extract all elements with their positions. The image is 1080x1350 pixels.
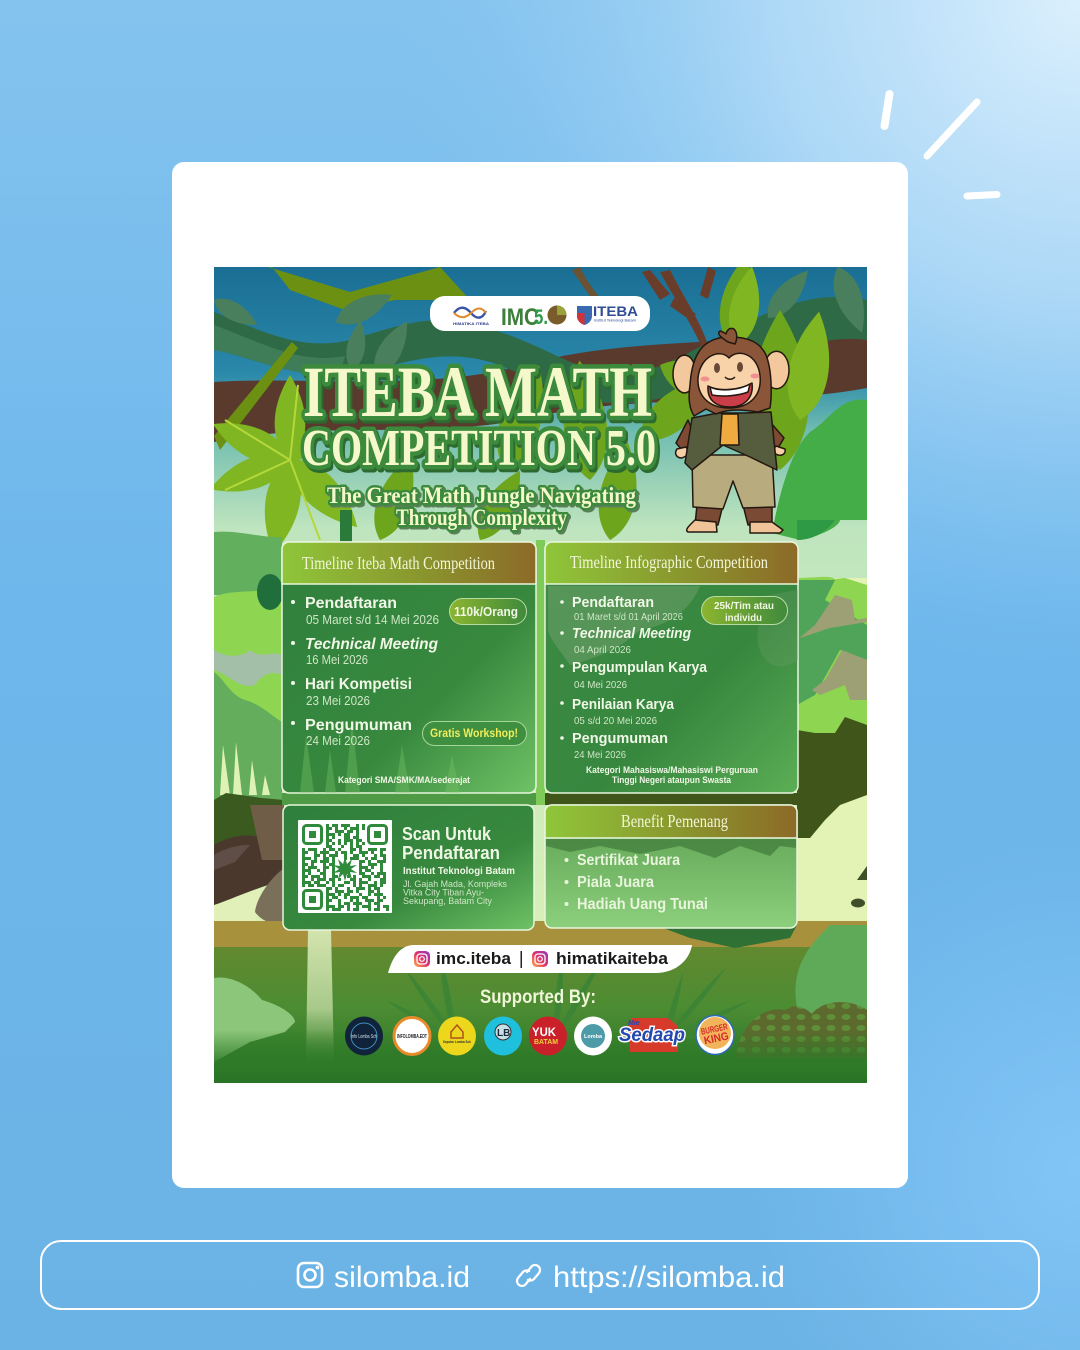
supported by heading: Supported By: xyxy=(480,987,596,1008)
logo: round: Lomba xyxy=(584,1034,602,1040)
logo: IMC 5.0: 5. xyxy=(534,306,548,329)
list: schedule: 16 Mei 2026 xyxy=(306,652,368,667)
white card xyxy=(172,162,908,1188)
subtitle: The Great Math Jungle Navigating xyxy=(327,483,636,508)
footer bar: https://silomba.id xyxy=(553,1261,785,1294)
monkey arms xyxy=(675,419,785,448)
monkey feet xyxy=(687,520,783,533)
logo: Infolomba xyxy=(394,1018,430,1054)
logo: yellow: Seputar Lomba Sch xyxy=(443,1039,471,1044)
footer bar xyxy=(41,1241,1039,1309)
logo: ITEBA: Institut Teknologi Batam xyxy=(594,318,636,322)
social handles pill: himatikaiteba xyxy=(556,949,669,968)
list: schedule: Penilaian Karya xyxy=(572,696,675,713)
logo: round xyxy=(574,1016,612,1056)
gutter foliage xyxy=(282,793,540,805)
title: ITEBA MATH xyxy=(303,352,652,432)
price pill: 25k/Tim atau xyxy=(714,600,774,612)
panel: scan to register xyxy=(283,805,534,930)
logo: Yuk Batam xyxy=(529,1016,567,1056)
logo pill xyxy=(430,296,650,331)
heading: Timeline Infographic Competition xyxy=(570,552,768,572)
logo: Yuk Batam: YUK xyxy=(532,1025,556,1039)
decorative sparkle strokes xyxy=(884,94,997,196)
monkey boots xyxy=(695,505,772,525)
title xyxy=(300,364,660,473)
social handles pill xyxy=(388,945,692,973)
list: schedule: Technical Meeting xyxy=(305,636,438,653)
footer bar: silomba.id xyxy=(334,1261,470,1294)
category note: Tinggi Negeri ataupun Swasta xyxy=(612,775,732,786)
list: schedule: Pengumpulan Karya xyxy=(572,659,708,676)
palm fronds xyxy=(386,968,750,1022)
poster xyxy=(205,254,874,1083)
logo: Mie Sedaap xyxy=(619,1018,685,1052)
subtitle: Through Complexity xyxy=(396,505,567,530)
scan text: Institut Teknologi Batam xyxy=(403,865,515,877)
jungle background scene xyxy=(205,254,874,1083)
category note: Kategori SMA/SMK/MA/sederajat xyxy=(338,775,471,786)
palm fruit clusters xyxy=(735,1002,867,1058)
logo: LB: LB xyxy=(497,1028,510,1039)
logo: himatika: HIMATIKA ITEBA xyxy=(453,321,489,326)
monkey hands xyxy=(676,446,785,458)
list: prizes: Hadiah Uang Tunai xyxy=(577,896,708,913)
right bush xyxy=(772,400,867,540)
scan text: Vitka City Tiban Ayu- xyxy=(403,888,484,898)
icon: instagram xyxy=(414,951,430,967)
monkey ears xyxy=(673,351,789,393)
list: schedule xyxy=(560,594,708,761)
icon: instagram outline xyxy=(298,1263,322,1287)
monkey vest xyxy=(685,412,777,470)
list: schedule: 05 Maret s/d 14 Mei 2026 xyxy=(306,612,439,627)
logo: ITEBA xyxy=(577,306,638,325)
panel: winner benefits xyxy=(545,805,797,928)
scan text xyxy=(402,824,515,907)
logo: ITEBA: ITEBA xyxy=(593,304,638,319)
icon: instagram xyxy=(532,951,548,967)
price pill xyxy=(450,598,526,624)
list: schedule: Pengumuman xyxy=(572,730,668,747)
mascot: monkey xyxy=(673,328,789,533)
icon: link xyxy=(517,1265,540,1286)
logo: IMC 5.0: IMC xyxy=(501,304,539,331)
price pill: 110k/Orang xyxy=(454,604,518,619)
QR code xyxy=(298,820,392,913)
logo: IMC 5.0 xyxy=(502,306,566,325)
list: schedule: 01 Maret s/d 01 April 2026 xyxy=(574,611,683,623)
panel: timeline math xyxy=(282,542,536,793)
logo: himatika xyxy=(453,308,489,326)
category note xyxy=(586,765,758,786)
panel: timeline infographic xyxy=(545,542,798,793)
scan text: Pendaftaran xyxy=(402,843,500,863)
price pill xyxy=(702,596,788,624)
heading: Benefit Pemenang xyxy=(621,811,728,831)
list: schedule: 04 Mei 2026 xyxy=(574,679,627,691)
workshop pill xyxy=(422,722,526,746)
list: schedule: 05 s/d 20 Mei 2026 xyxy=(574,715,657,727)
list: schedule: 23 Mei 2026 xyxy=(306,693,370,708)
monkey mouth xyxy=(708,383,752,407)
logo: Yuk Batam: BATAM xyxy=(534,1039,558,1046)
monkey eyes xyxy=(714,362,743,373)
logo: LB xyxy=(484,1016,522,1056)
monkey cheeks xyxy=(700,374,760,382)
list: schedule xyxy=(291,595,439,748)
logo: Infolomba: INFOLOMBA.EDT xyxy=(397,1034,427,1040)
list: schedule: 24 Mei 2026 xyxy=(306,733,370,748)
logo: yellow xyxy=(438,1016,476,1056)
monkey head xyxy=(689,337,771,416)
category note: Kategori Mahasiswa/Mahasiswi Perguruan xyxy=(586,765,758,776)
list: prizes: Piala Juara xyxy=(577,874,654,891)
social handles pill: imc.iteba xyxy=(436,949,512,968)
logo: Burger King xyxy=(696,1016,734,1054)
scan text: Jl. Gajah Mada, Kompleks xyxy=(403,879,507,890)
heading: Timeline Iteba Math Competition xyxy=(302,553,495,573)
scan text: Sekupang, Batam City xyxy=(403,896,492,907)
scan text: Scan Untuk xyxy=(402,824,492,844)
list: schedule: Pendaftaran xyxy=(572,594,654,611)
logo: Burger King: BURGER xyxy=(700,1021,729,1037)
monkey nose xyxy=(725,377,735,379)
left bushes xyxy=(214,532,283,800)
monkey pants xyxy=(692,455,775,509)
list: schedule: 24 Mei 2026 xyxy=(574,749,626,761)
price pill: individu xyxy=(725,612,762,624)
subtitle xyxy=(327,483,636,530)
ground xyxy=(214,921,867,948)
grey-green vine leaves xyxy=(209,263,874,381)
lime leaves behind title xyxy=(365,254,809,547)
list: schedule: Pendaftaran xyxy=(305,595,397,612)
title: COMPETITION 5.0 xyxy=(302,420,656,477)
sponsor logos xyxy=(345,1016,734,1056)
logo: Burger King: KING xyxy=(703,1030,730,1047)
workshop pill: Gratis Workshop! xyxy=(430,726,518,740)
logo: Info Lomba Sch: Info Lomba Sch xyxy=(351,1034,377,1040)
monkey face xyxy=(698,353,760,408)
list: schedule: Technical Meeting xyxy=(572,625,691,642)
list: prizes xyxy=(564,852,708,913)
logo: Mie Sedaap: Mie xyxy=(628,1020,640,1027)
stump and rocks xyxy=(214,793,284,925)
list: prizes: Sertifikat Juara xyxy=(577,852,680,869)
list: schedule: Hari Kompetisi xyxy=(305,676,412,693)
logo: Info Lomba Sch xyxy=(345,1016,383,1056)
right bushes xyxy=(797,520,867,923)
logo: Mie Sedaap: Sedaap xyxy=(619,1025,685,1046)
list: schedule: 04 April 2026 xyxy=(574,644,631,656)
list: schedule: Pengumuman xyxy=(305,717,412,734)
